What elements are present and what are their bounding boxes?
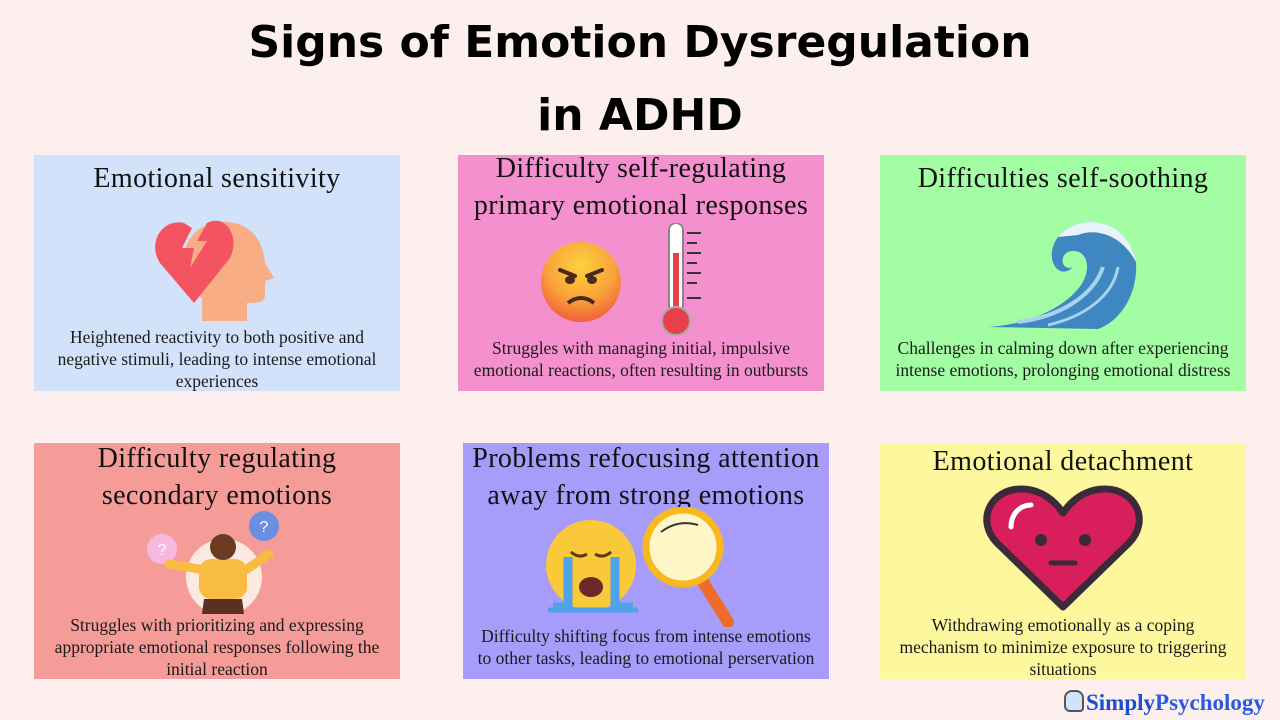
icon: angry face and thermometer	[541, 223, 701, 336]
panel: secondary emotions	[34, 443, 400, 679]
panel: self-soothing	[880, 155, 1246, 391]
logo: SimplyPsychology	[1086, 690, 1265, 715]
heading	[474, 153, 808, 221]
description: intense emotions, prolonging emotional distress	[896, 360, 1230, 380]
heading: away from strong emotions	[487, 480, 805, 511]
description: mechanism to minimize exposure to triggering	[899, 637, 1227, 657]
panel: emotional detachment	[880, 443, 1246, 679]
panel: emotional sensitivity	[34, 155, 400, 391]
heading: secondary emotions	[102, 480, 332, 511]
title: in ADHD	[537, 90, 743, 141]
heading: Problems refocusing attention	[472, 443, 820, 474]
icon: neutral heart	[983, 486, 1143, 610]
panel: refocusing attention	[463, 443, 829, 679]
description	[58, 327, 376, 391]
description: negative stimuli, leading to intense emotional	[58, 349, 376, 369]
description: experiences	[176, 371, 258, 391]
icon: crying face and magnifier	[546, 507, 734, 627]
icon: wave	[988, 222, 1136, 329]
description	[896, 338, 1230, 380]
description: Challenges in calming down after experiencing	[898, 338, 1228, 358]
title: Signs of Emotion Dysregulation	[248, 17, 1032, 68]
icon: confused woman: ?	[158, 542, 167, 559]
description: emotional reactions, often resulting in outbursts	[474, 360, 808, 380]
heading: Difficulties self-soothing	[918, 163, 1208, 194]
description: Withdrawing emotionally as a coping	[932, 615, 1194, 635]
icon: confused woman	[147, 511, 279, 614]
heading: Difficulty regulating	[98, 443, 336, 474]
heading: Emotional detachment	[933, 446, 1193, 477]
heading: Emotional sensitivity	[93, 163, 341, 194]
icon: head with broken heart	[155, 220, 274, 321]
panel: primary emotional responses	[458, 155, 824, 391]
description: situations	[1029, 659, 1097, 679]
description: Heightened reactivity to both positive and	[70, 327, 364, 347]
heading: Difficulty self-regulating	[496, 153, 786, 184]
description: Struggles with prioritizing and expressing	[70, 615, 364, 635]
description: initial reaction	[166, 659, 268, 679]
description	[474, 338, 808, 380]
description	[899, 615, 1227, 679]
heading	[98, 443, 336, 511]
description	[55, 615, 379, 679]
description	[478, 626, 814, 668]
description: to other tasks, leading to emotional perservation	[478, 648, 814, 668]
title	[248, 17, 1032, 141]
heading	[472, 443, 820, 511]
description: Struggles with managing initial, impulsive	[492, 338, 790, 358]
heading: primary emotional responses	[474, 190, 808, 221]
description: Difficulty shifting focus from intense emotions	[481, 626, 811, 646]
description: appropriate emotional responses following the	[55, 637, 379, 657]
icon: confused woman: ?	[260, 519, 269, 536]
